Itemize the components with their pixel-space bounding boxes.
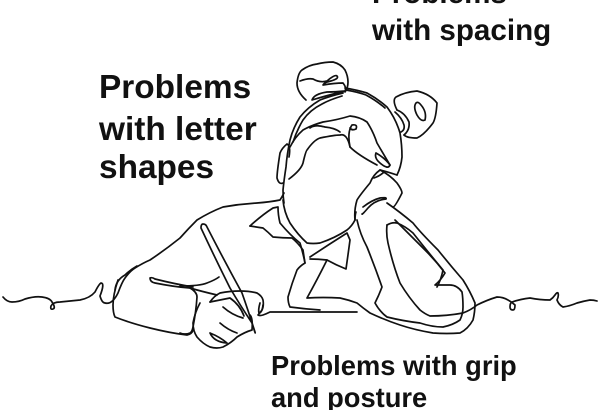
left squiggle, shoulder and sleeve [3,193,284,335]
pencil [201,224,255,333]
resting arm [357,220,597,327]
ear [277,144,290,183]
face and collar [250,200,475,334]
label: problems with letter shapes: shapes [99,149,214,186]
label: problems with grip and posture: Problems with grip [271,350,517,381]
writing hand [193,291,357,348]
label: problems with letter shapes: with letter [99,111,257,148]
cheek-resting hand [355,170,402,220]
label: problems with letter shapes [98,69,257,186]
label: problems with letter shapes: Problems [99,69,251,106]
label: problems with spacing: with spacing [372,14,551,47]
right hair bun [394,91,437,138]
top hair bun [297,62,348,100]
label: problems with grip and posture [271,350,517,410]
head outline and hairline [283,88,402,203]
